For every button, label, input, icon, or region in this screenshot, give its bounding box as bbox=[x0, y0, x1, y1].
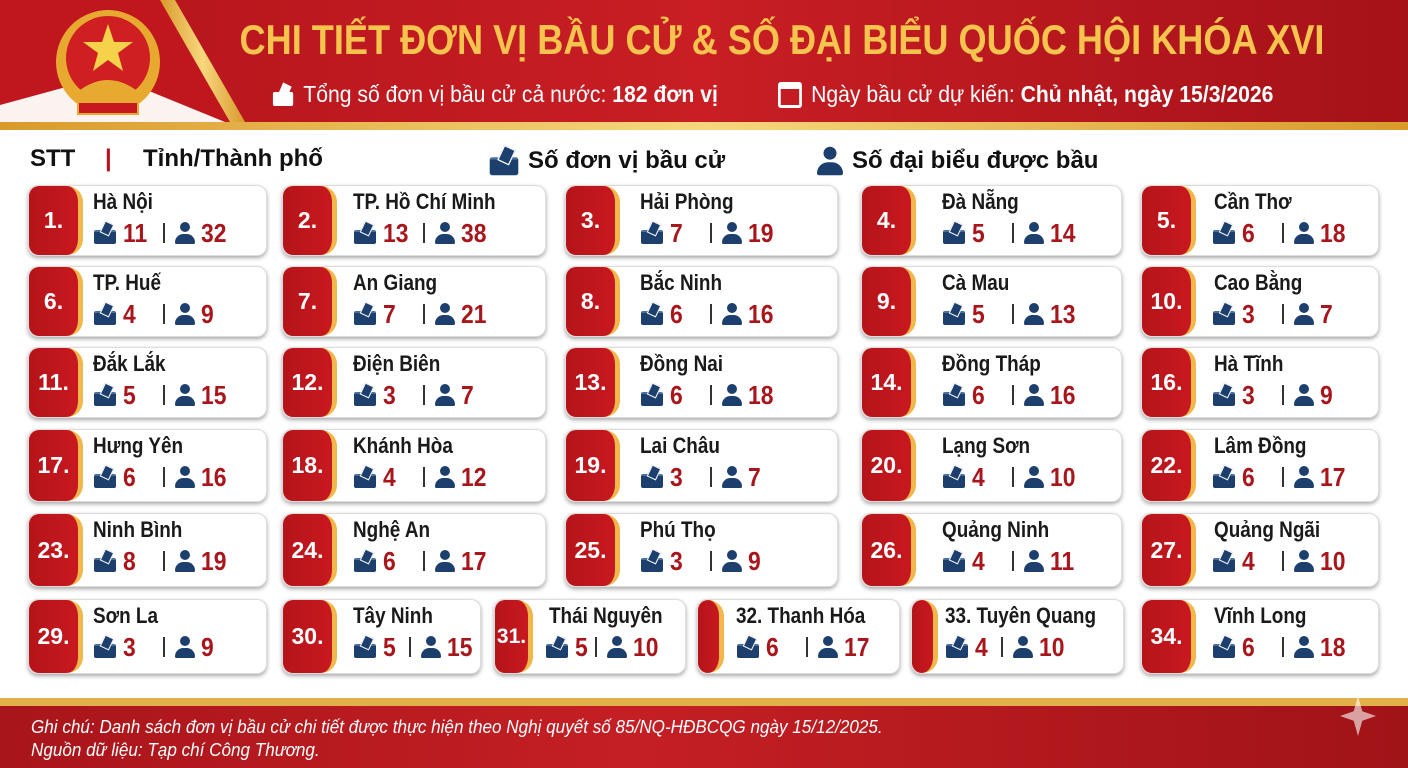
card: Hưng Yên bbox=[28, 429, 267, 502]
card: Quảng Ninh: 26. bbox=[870, 536, 902, 562]
card: Cần Thơ: 6 bbox=[1242, 218, 1255, 248]
card: Tuyên Quang: 10 bbox=[1039, 632, 1064, 662]
subtitle: election date: Ngày bầu cử dự kiến: bbox=[811, 81, 1015, 107]
card: Ninh Bình: 8 bbox=[123, 546, 136, 576]
subtitle: election date bbox=[778, 81, 1273, 108]
card: Đắk Lắk: 15 bbox=[201, 380, 226, 410]
card: Khánh Hòa bbox=[282, 429, 546, 502]
card: TP. Hồ Chí Minh bbox=[282, 185, 546, 256]
card: Thanh Hóa bbox=[697, 599, 900, 674]
card: Quảng Ninh: Quảng Ninh bbox=[942, 517, 1049, 542]
card: Ninh Bình: 23. bbox=[38, 536, 69, 562]
card: Thái Nguyên: Thái Nguyên bbox=[549, 603, 663, 628]
card: Cà Mau: 5 bbox=[972, 298, 985, 328]
card: Quảng Ngãi: 4 bbox=[1242, 546, 1255, 576]
card: Quảng Ngãi bbox=[1141, 513, 1379, 587]
column headers: STT bbox=[30, 145, 75, 172]
card: Điện Biên bbox=[282, 347, 546, 418]
card: Quảng Ninh: 11 bbox=[1050, 546, 1074, 576]
card: Đắk Lắk: 5 bbox=[123, 380, 136, 410]
card: Cà Mau: 9. bbox=[877, 288, 896, 314]
card: Lạng Sơn bbox=[861, 429, 1122, 502]
card: Cao Bằng: 10. bbox=[1150, 288, 1182, 314]
card: Điện Biên: 12. bbox=[292, 369, 323, 395]
card: Đà Nẵng: Đà Nẵng bbox=[942, 189, 1019, 214]
card: Sơn La: 3 bbox=[123, 632, 136, 662]
card: Đà Nẵng bbox=[861, 185, 1122, 256]
card: Lâm Đồng bbox=[1141, 429, 1379, 502]
header banner bbox=[0, 0, 1408, 130]
column headers bbox=[30, 144, 1098, 176]
card: Nghệ An: 24. bbox=[292, 536, 323, 562]
card: Bắc Ninh: 6 bbox=[670, 298, 683, 328]
card: Bắc Ninh bbox=[565, 266, 838, 337]
card: Cao Bằng: 3 bbox=[1242, 298, 1255, 328]
card: Cà Mau: 13 bbox=[1050, 298, 1075, 328]
icon: national emblem bbox=[56, 10, 160, 115]
card: Hải Phòng bbox=[565, 185, 838, 256]
subtitle: total units bbox=[272, 81, 718, 107]
card: Cần Thơ: Cần Thơ bbox=[1214, 189, 1292, 214]
card: Điện Biên: 7 bbox=[461, 380, 474, 410]
card: Quảng Ninh: 4 bbox=[972, 546, 985, 576]
card: Điện Biên: 3 bbox=[383, 380, 396, 410]
card: Hà Tĩnh: Hà Tĩnh bbox=[1214, 351, 1283, 376]
card: Cần Thơ: 18 bbox=[1320, 218, 1345, 248]
card: Lai Châu: 3 bbox=[670, 462, 683, 492]
card: TP. Huế: 9 bbox=[201, 298, 214, 328]
column headers: | bbox=[105, 145, 112, 172]
card: Cần Thơ bbox=[1141, 185, 1379, 256]
card: Nghệ An bbox=[282, 513, 546, 587]
card: Đắk Lắk: 11. bbox=[38, 369, 69, 395]
subtitle: total units: 182 đơn vị bbox=[612, 81, 718, 107]
card: An Giang: 7 bbox=[383, 298, 396, 328]
card: Vĩnh Long: 18 bbox=[1320, 632, 1345, 662]
card: Cần Thơ: 5. bbox=[1157, 207, 1176, 233]
card: Tuyên Quang: 33. Tuyên Quang bbox=[945, 603, 1096, 628]
card: Đà Nẵng: 14 bbox=[1050, 218, 1075, 248]
card: Quảng Ngãi: 10 bbox=[1320, 546, 1345, 576]
card: Hà Nội: Hà Nội bbox=[93, 189, 153, 214]
card: Hà Nội: 32 bbox=[201, 218, 226, 248]
card: Tây Ninh: Tây Ninh bbox=[353, 603, 433, 628]
card: Lai Châu bbox=[565, 429, 838, 502]
card: Lai Châu: Lai Châu bbox=[640, 433, 720, 458]
footer note bbox=[31, 717, 883, 760]
card: TP. Huế: 6. bbox=[44, 288, 63, 314]
card: Hưng Yên: Hưng Yên bbox=[93, 433, 183, 458]
card: An Giang: 7. bbox=[298, 288, 317, 314]
card: Phú Thọ: Phú Thọ bbox=[640, 517, 716, 542]
card: Tây Ninh: 30. bbox=[292, 623, 323, 649]
card: Ninh Bình: Ninh Bình bbox=[93, 517, 182, 542]
card: Hà Nội: 1. bbox=[44, 207, 63, 233]
card: Phú Thọ bbox=[565, 513, 838, 587]
column headers: Tỉnh/Thành phố bbox=[143, 145, 323, 172]
card: Cao Bằng: Cao Bằng bbox=[1214, 270, 1302, 295]
card: Thanh Hóa: 32. Thanh Hóa bbox=[736, 603, 865, 628]
card: Quảng Ngãi: Quảng Ngãi bbox=[1214, 517, 1320, 542]
card: Lạng Sơn: Lạng Sơn bbox=[942, 433, 1030, 458]
card: Lai Châu: 7 bbox=[748, 462, 761, 492]
card: Bắc Ninh: 16 bbox=[748, 298, 773, 328]
card: Lạng Sơn: 4 bbox=[972, 462, 985, 492]
card: Hải Phòng: 7 bbox=[670, 218, 683, 248]
subtitle: total units: Tổng số đơn vị bầu cử cả nước: bbox=[303, 81, 606, 107]
card: TP. Hồ Chí Minh: TP. Hồ Chí Minh bbox=[353, 189, 496, 214]
card: Khánh Hòa: 18. bbox=[292, 452, 323, 478]
card: Hà Tĩnh: 9 bbox=[1320, 380, 1333, 410]
card: Đồng Tháp bbox=[861, 347, 1122, 418]
card: Đồng Nai: Đồng Nai bbox=[640, 351, 723, 376]
card: Thái Nguyên: 5 bbox=[575, 632, 588, 662]
card: Cao Bằng: 7 bbox=[1320, 298, 1333, 328]
card: An Giang: An Giang bbox=[353, 270, 437, 295]
card: TP. Hồ Chí Minh: 13 bbox=[383, 218, 408, 248]
footer note: Ghi chú: Danh sách đơn vị bầu cử chi tiết được thực hiện theo Nghị quyết số 85/NQ-HĐBCQG ngày 15/12/2025. bbox=[31, 717, 883, 737]
card: Lâm Đồng: 22. bbox=[1150, 452, 1182, 478]
card: Thanh Hóa: 17 bbox=[844, 632, 869, 662]
card: Lai Châu: 19. bbox=[574, 452, 606, 478]
card: Đắk Lắk: Đắk Lắk bbox=[93, 351, 166, 376]
card: Phú Thọ: 25. bbox=[574, 536, 606, 562]
card: Tuyên Quang: 4 bbox=[975, 632, 988, 662]
card: Hải Phòng: Hải Phòng bbox=[640, 189, 734, 214]
card: Thái Nguyên: 10 bbox=[633, 632, 658, 662]
title: CHI TIẾT ĐƠN VỊ BẦU CỬ & SỐ ĐẠI BIỂU QUỐC HỘI KHÓA XVI bbox=[240, 16, 1324, 63]
card: Cà Mau: Cà Mau bbox=[942, 270, 1009, 295]
card: Khánh Hòa: Khánh Hòa bbox=[353, 433, 453, 458]
card: Cao Bằng bbox=[1141, 266, 1379, 337]
card: Lâm Đồng: 17 bbox=[1320, 462, 1345, 492]
card: Ninh Bình bbox=[28, 513, 267, 587]
card: Vĩnh Long bbox=[1141, 599, 1379, 674]
card: Hà Tĩnh: 3 bbox=[1242, 380, 1255, 410]
card: Phú Thọ: 3 bbox=[670, 546, 683, 576]
card: Hà Tĩnh: 16. bbox=[1150, 369, 1182, 395]
card: An Giang: 21 bbox=[461, 298, 486, 328]
card: An Giang bbox=[282, 266, 546, 337]
card: Sơn La: 29. bbox=[38, 623, 69, 649]
card: Hưng Yên: 6 bbox=[123, 462, 136, 492]
card: Đồng Tháp: 6 bbox=[972, 380, 985, 410]
card: Sơn La bbox=[28, 599, 267, 674]
card: Sơn La: 9 bbox=[201, 632, 214, 662]
card: Lâm Đồng: 6 bbox=[1242, 462, 1255, 492]
card: Đắk Lắk bbox=[28, 347, 267, 418]
card: Khánh Hòa: 12 bbox=[461, 462, 486, 492]
card: TP. Huế bbox=[28, 266, 267, 337]
card: Thái Nguyên bbox=[494, 599, 686, 674]
card: Lạng Sơn: 10 bbox=[1050, 462, 1075, 492]
card: Quảng Ngãi: 27. bbox=[1150, 536, 1182, 562]
card: Hà Tĩnh bbox=[1141, 347, 1379, 418]
card: Vĩnh Long: 6 bbox=[1242, 632, 1255, 662]
subtitle: election date: Chủ nhật, ngày 15/3/2026 bbox=[1021, 81, 1273, 107]
card: Đồng Nai: 13. bbox=[574, 369, 606, 395]
card: Lạng Sơn: 20. bbox=[870, 452, 902, 478]
card: TP. Huế: TP. Huế bbox=[93, 270, 161, 295]
card: Nghệ An: 17 bbox=[461, 546, 486, 576]
card: TP. Huế: 4 bbox=[123, 298, 136, 328]
card: Đồng Tháp: 16 bbox=[1050, 380, 1075, 410]
card: Bắc Ninh: Bắc Ninh bbox=[640, 270, 722, 295]
card: Tây Ninh: 5 bbox=[383, 632, 396, 662]
card: Hưng Yên: 16 bbox=[201, 462, 226, 492]
card: Hưng Yên: 17. bbox=[38, 452, 69, 478]
card: Hải Phòng: 19 bbox=[748, 218, 773, 248]
card: TP. Hồ Chí Minh: 2. bbox=[298, 207, 317, 233]
icon: sparkle bbox=[1340, 696, 1376, 736]
card: Hà Nội bbox=[28, 185, 267, 256]
card: Đồng Tháp: 14. bbox=[870, 369, 902, 395]
card: Đà Nẵng: 5 bbox=[972, 218, 985, 248]
card: Đồng Nai: 18 bbox=[748, 380, 773, 410]
footer band bbox=[0, 698, 1408, 768]
card: Đồng Tháp: Đồng Tháp bbox=[942, 351, 1041, 376]
column headers: Số đơn vị bầu cử bbox=[528, 147, 725, 174]
card: Thái Nguyên: 31. bbox=[497, 624, 526, 648]
card: Đồng Nai: 6 bbox=[670, 380, 683, 410]
card: Bắc Ninh: 8. bbox=[581, 288, 600, 314]
card: Hà Nội: 11 bbox=[123, 218, 147, 248]
card: Vĩnh Long: 34. bbox=[1150, 623, 1182, 649]
card: Lâm Đồng: Lâm Đồng bbox=[1214, 433, 1307, 458]
footer note: Nguồn dữ liệu: Tạp chí Công Thương. bbox=[31, 740, 320, 760]
card: Cà Mau bbox=[861, 266, 1122, 337]
card: Nghệ An: 6 bbox=[383, 546, 396, 576]
card: Khánh Hòa: 4 bbox=[383, 462, 396, 492]
card: Thanh Hóa: 6 bbox=[766, 632, 779, 662]
card: Phú Thọ: 9 bbox=[748, 546, 761, 576]
card: Tuyên Quang bbox=[911, 599, 1124, 674]
column headers: Số đại biểu được bầu bbox=[852, 147, 1098, 174]
card: Điện Biên: Điện Biên bbox=[353, 351, 440, 376]
card: Nghệ An: Nghệ An bbox=[353, 517, 430, 542]
card: Ninh Bình: 19 bbox=[201, 546, 226, 576]
card: Hải Phòng: 3. bbox=[581, 207, 600, 233]
card: Tây Ninh: 15 bbox=[447, 632, 472, 662]
card: Đồng Nai bbox=[565, 347, 838, 418]
card: Vĩnh Long: Vĩnh Long bbox=[1214, 603, 1306, 628]
card: TP. Hồ Chí Minh: 38 bbox=[461, 218, 486, 248]
card: Sơn La: Sơn La bbox=[93, 603, 158, 628]
card: Quảng Ninh bbox=[861, 513, 1122, 587]
card: Tây Ninh bbox=[282, 599, 481, 674]
card: Đà Nẵng: 4. bbox=[877, 207, 896, 233]
